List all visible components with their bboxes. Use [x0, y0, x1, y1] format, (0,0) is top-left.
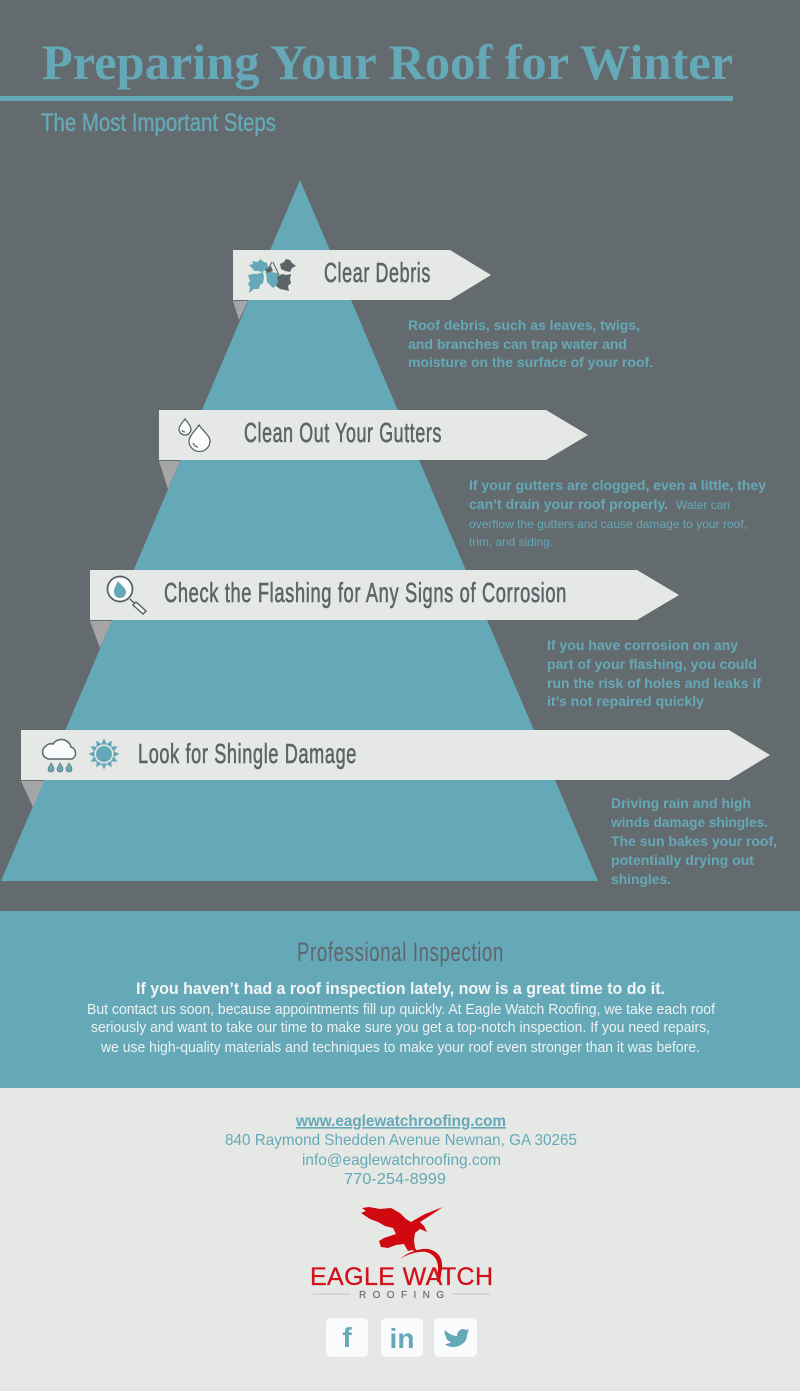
description 2: Water can: [676, 498, 730, 512]
banner: [90, 570, 679, 620]
step 2: gutters: [159, 410, 588, 489]
panel: footer: [0, 1088, 800, 1391]
step 3: flashing: [90, 570, 679, 648]
description 4: winds damage shingles.: [610, 814, 768, 830]
panel: professional inspection: [0, 911, 800, 1088]
icon: leaves: [248, 259, 296, 293]
contact details: info@eaglewatchroofing.com: [302, 1152, 501, 1169]
banner: [159, 410, 588, 460]
description 2: [469, 477, 766, 549]
description 3: [547, 637, 761, 709]
contact details: www.eaglewatchroofing.com: [295, 1113, 506, 1130]
description 1: [408, 317, 653, 370]
banner: [21, 730, 770, 780]
banner: [233, 250, 491, 300]
description 4: The sun bakes your roof,: [611, 833, 777, 849]
body text: [87, 1001, 716, 1056]
description 2: can’t drain your roof properly.: [469, 496, 668, 512]
social: linkedin: [381, 1318, 423, 1357]
banner fold: [21, 781, 44, 807]
contact details: 770-254-8999: [344, 1171, 446, 1188]
pyramid: [1, 180, 598, 881]
description 3: part of your flashing, you could: [547, 656, 757, 672]
description 3: If you have corrosion on any: [547, 637, 738, 653]
contact details: 840 Raymond Shedden Avenue Newnan, GA 30265: [225, 1132, 577, 1149]
description 2: trim, and siding.: [469, 535, 553, 549]
body text: But contact us soon, because appointments fill up quickly. At Eagle Watch Roofing, we take each roof: [87, 1001, 716, 1018]
icon: magnifying glass: [108, 576, 146, 614]
description 4: potentially drying out: [611, 852, 754, 868]
social: linkedin: in: [390, 1323, 414, 1354]
lead sentence: If you haven’t had a roof inspection lately, now is a great time to do it.: [136, 979, 665, 998]
description 2: overflow the gutters and cause damage to your roof,: [469, 517, 747, 531]
wordmark: EAGLE WATCH: [310, 1263, 493, 1291]
description 4: Driving rain and high: [611, 795, 751, 811]
heading: Clean Out Your Gutters: [244, 417, 442, 448]
title: Preparing Your Roof for Winter: [42, 34, 733, 90]
contact details: [225, 1113, 577, 1188]
step 1: clear debris: [233, 250, 491, 320]
banner fold: [90, 621, 112, 648]
description 1: and branches can trap water and: [408, 336, 627, 352]
social: facebook: [326, 1318, 368, 1357]
banner fold: [159, 461, 180, 489]
icon: sun: [88, 738, 120, 770]
step 4: shingle damage: [21, 730, 770, 807]
body text: seriously and want to take our time to make sure you get a top-notch inspection. If you need repairs,: [91, 1019, 710, 1036]
icon: rain cloud: [43, 740, 76, 772]
description 4: shingles.: [611, 871, 671, 887]
social: facebook: f: [342, 1322, 352, 1353]
description 1: moisture on the surface of your roof.: [408, 354, 653, 370]
description 1: Roof debris, such as leaves, twigs,: [408, 317, 640, 333]
logo subline: ROOFING: [359, 1290, 444, 1301]
subtitle: The Most Important Steps: [41, 109, 276, 137]
heading: Check the Flashing for Any Signs of Corrosion: [164, 577, 567, 608]
eagle: [361, 1207, 443, 1282]
description 2: If your gutters are clogged, even a little, they: [469, 477, 766, 493]
heading: Professional Inspection: [297, 937, 504, 967]
description 3: it’s not repaired quickly: [547, 693, 704, 709]
title rule: [0, 96, 733, 101]
heading: Look for Shingle Damage: [138, 738, 357, 769]
logo: [310, 1207, 493, 1301]
body text: we use high-quality materials and techniques to make your roof even stronger than it was before.: [100, 1039, 700, 1056]
description 4: [610, 795, 777, 887]
icon: water drops: [179, 419, 210, 452]
heading: Clear Debris: [324, 257, 431, 288]
description 3: run the risk of holes and leaks if: [547, 675, 761, 691]
social: twitter: [434, 1318, 477, 1357]
banner fold: [233, 301, 248, 320]
